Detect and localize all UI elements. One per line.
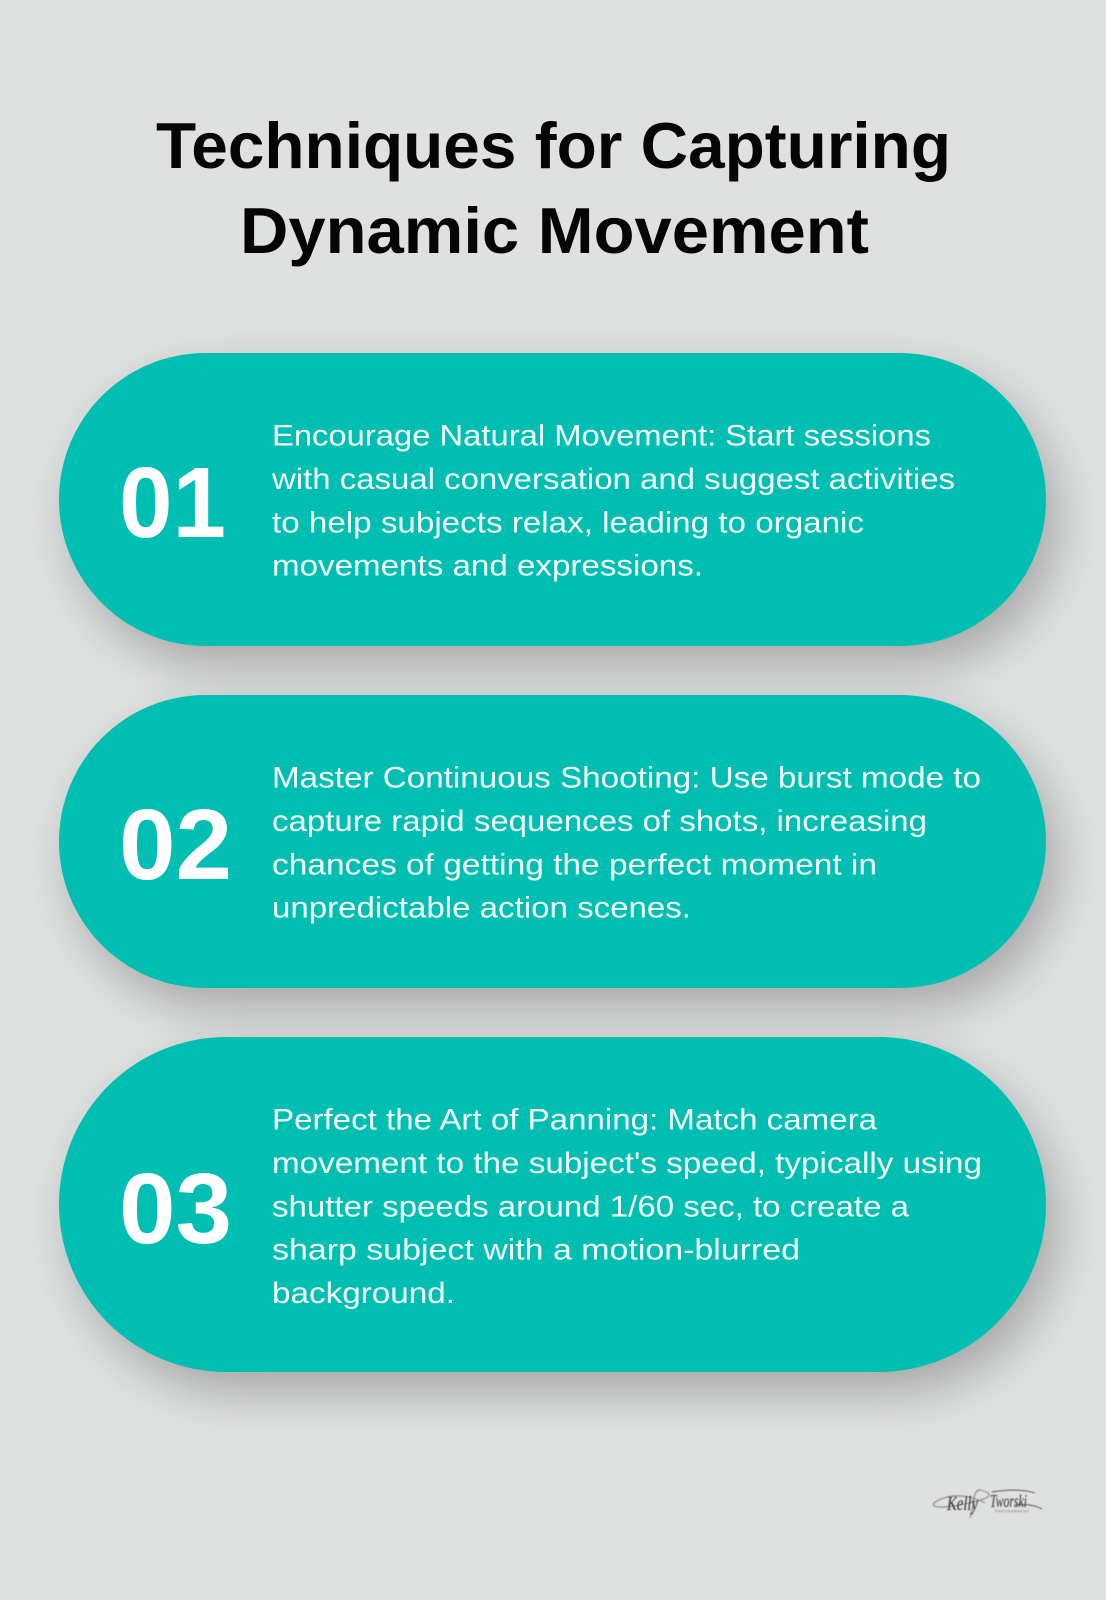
text: step 03 description bbox=[272, 1104, 982, 1310]
logo: signature: PHOTOGRAPHY bbox=[995, 1510, 1030, 1514]
panel: step 01 bbox=[59, 353, 1058, 666]
text: step 02 description: capture rapid sequences of shots, increasing bbox=[272, 805, 927, 838]
logo: signature bbox=[933, 1490, 1042, 1518]
text: step 01 description: Encourage Natural Movement: Start sessions bbox=[272, 420, 931, 452]
logo: signature: Tworski bbox=[990, 1491, 1027, 1511]
panel: step 03 bbox=[59, 1037, 1058, 1393]
panel: step 02 bbox=[59, 695, 1058, 1008]
text: step 03 description: shutter speeds around 1/60 sec, to create a bbox=[272, 1190, 909, 1224]
text: step 01 description: to help subjects relax, leading to organic bbox=[272, 506, 864, 540]
text: step 03 description: background. bbox=[272, 1277, 455, 1310]
text: step 01 description: with casual conversation and suggest activities bbox=[271, 463, 955, 496]
text: step 03 description: Perfect the Art of Panning: Match camera bbox=[272, 1104, 877, 1136]
text: step 02 description bbox=[272, 762, 981, 924]
text: step 02 description: Master Continuous Shooting: Use burst mode to bbox=[272, 762, 981, 794]
text: step 01 description: movements and expressions. bbox=[272, 550, 703, 582]
text: step 01 description bbox=[271, 420, 955, 582]
number 03: 03 bbox=[119, 1153, 232, 1265]
text: step 03 description: movement to the subject's speed, typically using bbox=[272, 1147, 982, 1180]
title: Dynamic Movement bbox=[240, 194, 869, 267]
text: step 02 description: chances of getting the perfect moment in bbox=[272, 848, 877, 882]
title: Techniques for Capturing bbox=[156, 109, 951, 182]
number 02: 02 bbox=[119, 789, 232, 901]
title bbox=[156, 109, 951, 267]
text: step 02 description: unpredictable action scenes. bbox=[272, 892, 691, 924]
text: step 03 description: sharp subject with a motion-blurred bbox=[272, 1234, 800, 1266]
number 01: 01 bbox=[119, 447, 226, 559]
logo: signature: Kelly bbox=[946, 1493, 978, 1515]
